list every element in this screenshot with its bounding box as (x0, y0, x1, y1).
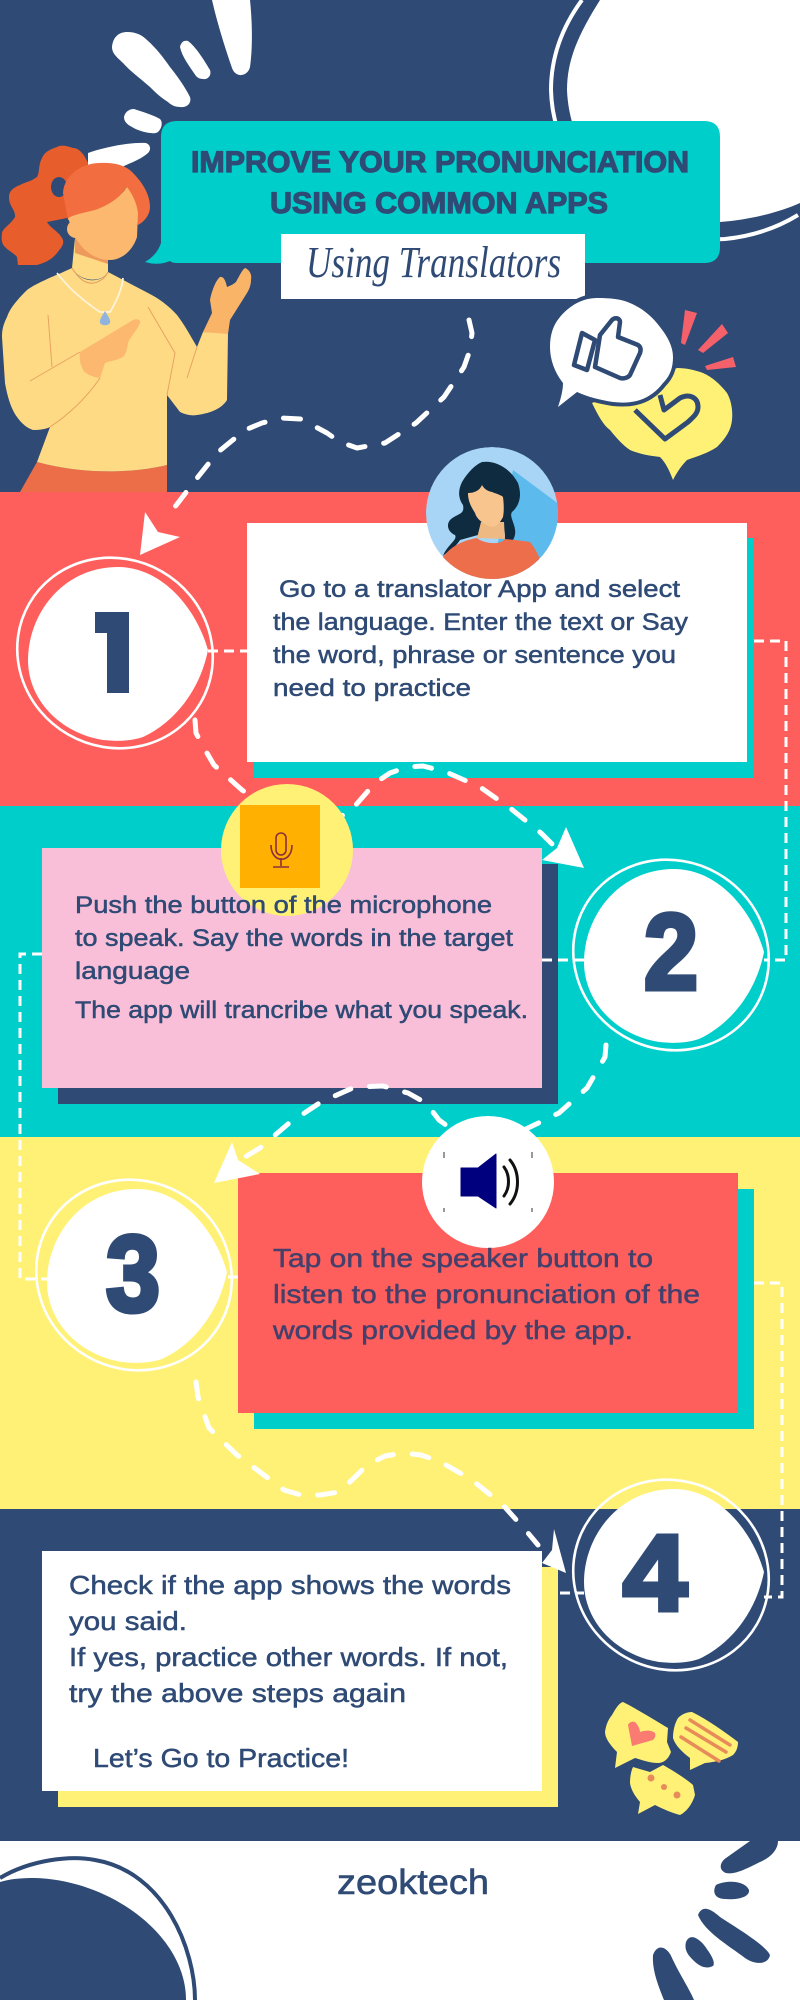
header background (0, 0, 800, 492)
connector: card 1 to step 2 circle (754, 641, 786, 960)
footer background (0, 1841, 800, 2000)
dashed path: step 1 to step 2 (195, 720, 553, 845)
sweater (2, 268, 228, 471)
ponytail gap (51, 177, 67, 197)
title text: IMPROVE YOUR PRONUNCIATION (191, 146, 689, 179)
pendant (100, 311, 110, 325)
text: step 3 (272, 1243, 700, 1345)
arrow: to step 4 (542, 1529, 566, 1573)
band: step 2 (0, 806, 800, 1137)
title bubble: USING COMMON APPS (270, 187, 608, 220)
text: step 4: try the above steps again (69, 1678, 406, 1708)
connector: step 3 circle to card 3 (228, 1276, 238, 1278)
collar line (72, 268, 108, 283)
ear (67, 220, 85, 238)
ponytail (2, 146, 88, 265)
icon: chat bubbles (605, 1702, 738, 1815)
dashed path: step 3 to step 4 (196, 1382, 538, 1545)
icon: thumbs up speech bubble (550, 298, 673, 407)
title bubble (145, 121, 720, 264)
text: step 1: the word, phrase or sentence you (273, 642, 676, 669)
text: step 1: Go to a translator App and select (279, 576, 680, 603)
text: step 1 (273, 576, 688, 702)
step 1: number circle: 1 (90, 595, 132, 716)
step 3: number circle: 3 (106, 1213, 160, 1334)
decoration: top left white splash (88, 0, 252, 167)
text: step 2: The app will trancribe what you speak. (75, 997, 528, 1024)
woman illustration (2, 146, 251, 492)
band: step 4 (0, 1509, 800, 1841)
text: step 2: Push the button of the microphone (75, 892, 492, 919)
text: step 4: you said. (69, 1606, 187, 1636)
pointing hand (80, 319, 140, 378)
band: step 3 (0, 1137, 800, 1509)
step 1: number circle (16, 556, 214, 750)
text: step 2 (75, 892, 528, 1024)
icon: red rays (681, 310, 736, 370)
arrow: to step 3 (214, 1142, 260, 1183)
step 2: number circle (538, 824, 800, 1086)
card 3 (238, 1173, 754, 1429)
icon: speaker (422, 1116, 554, 1248)
arrow: to step 2 (542, 827, 584, 868)
text: step 3: listen to the pronunciation of the (273, 1279, 700, 1309)
connector: step 2 circle to card 2 (542, 958, 584, 962)
icon: woman avatar (426, 447, 560, 585)
text: step 4: Check if the app shows the words (69, 1570, 511, 1600)
subtitle box (281, 234, 585, 299)
text: step 4: Let’s Go to Practice! (93, 1743, 349, 1773)
text: step 1: the language. Enter the text or Say (273, 609, 688, 636)
dashed path: header to step 1 (171, 320, 472, 512)
step 2: number circle: 2 (644, 891, 698, 1012)
card 4 (42, 1551, 558, 1807)
decoration: footer right splash (653, 1841, 778, 2000)
head hair (63, 163, 150, 225)
text: step 1: need to practice (273, 675, 471, 702)
text: step 2: to speak. Say the words in the target (75, 925, 513, 952)
decoration: top right white circle (551, 0, 800, 239)
connector: step 1 circle to card (208, 650, 247, 652)
text: step 4: If yes, practice other words. If not, (69, 1642, 508, 1672)
card 1 (247, 523, 754, 778)
text: step 3: Tap on the speaker button to (273, 1243, 653, 1273)
step 4: number circle: 4 (623, 1512, 687, 1633)
step 4: number circle (538, 1444, 800, 1706)
necklace (57, 273, 123, 312)
text: step 3: words provided by the app. (272, 1315, 633, 1345)
neck (72, 238, 108, 280)
sweater creases (30, 307, 197, 427)
dashed path: step 2 to step 3 (240, 1045, 606, 1160)
arrow: to step 1 (140, 512, 180, 555)
skirt (20, 462, 167, 492)
text: step 4 (69, 1570, 511, 1773)
subtitle box: Using Translators (306, 238, 561, 287)
connector: card 2 to step 3 circle (20, 954, 47, 1279)
band: step 1 (0, 492, 800, 806)
connector: step 4 circle to card 4 (560, 1592, 584, 1594)
decoration: footer left circle (0, 1858, 195, 2000)
face (68, 187, 138, 260)
neck shadow (75, 238, 108, 264)
card 2 (42, 848, 558, 1104)
text: step 2: language (75, 958, 190, 985)
raised hand (203, 268, 251, 334)
footer brand text: zeoktech (337, 1863, 489, 1902)
icon: heart speech bubble (592, 368, 732, 480)
connector: card 3 to step 4 circle (754, 1283, 782, 1597)
step 3: number circle (1, 1144, 267, 1406)
icon: microphone (221, 784, 353, 916)
